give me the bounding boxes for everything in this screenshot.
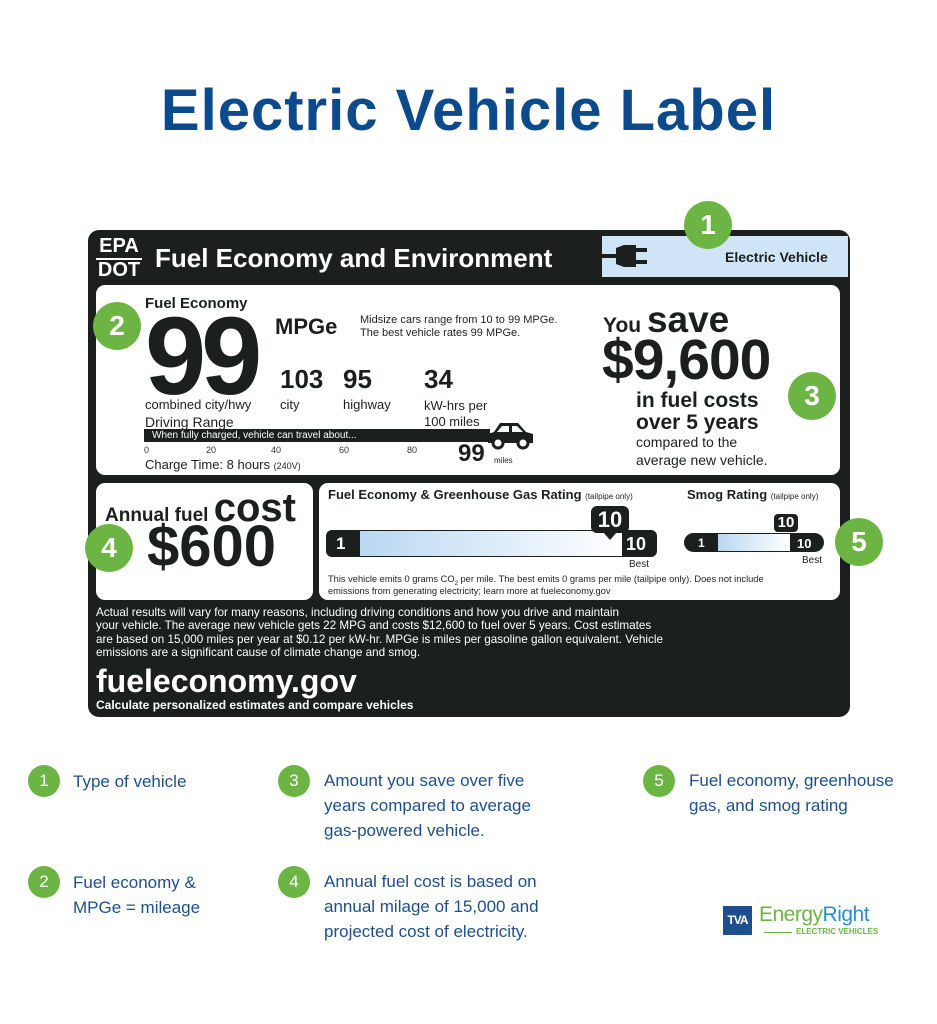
savings block: You save — [603, 299, 729, 340]
smog marker — [774, 514, 798, 532]
smog rating bar: 10 — [797, 536, 811, 551]
panel: fuel economy: combined city/hwy — [145, 397, 251, 412]
header EPA DOT — [96, 235, 142, 281]
panel: fuel economy: kW-hrs per — [424, 398, 487, 413]
footer disclaimer: emissions are a significant cause of climate change and smog. — [96, 646, 420, 659]
smog marker: 10 — [778, 514, 794, 531]
smog rating bar — [684, 533, 824, 552]
driving range bar — [144, 429, 490, 442]
legend item 5: gas, and smog rating — [689, 796, 848, 815]
panel: fuel economy: 20 — [206, 445, 216, 455]
footer disclaimer: are based on 15,000 miles per year at $0.12 per kW-hr. MPGe is miles per gasoline gallon equivalent. Vehicle — [96, 633, 663, 646]
panel: ratings: This vehicle emits 0 grams CO2 per mile. The best emits 0 grams per mile (tailpipe only). Does not include — [328, 574, 764, 587]
badge 3 — [788, 372, 836, 420]
panel: ratings: Fuel Economy & Greenhouse Gas Rating (tailpipe only) — [328, 487, 633, 502]
panel: fuel economy: The best vehicle rates 99 MPGe. — [360, 327, 520, 339]
label: fuel economy sticker — [88, 230, 850, 717]
GHG rating bar: 10 — [626, 534, 646, 554]
panel: fuel economy: 103 — [280, 364, 323, 394]
footer disclaimer: Actual results will vary for many reasons, including driving conditions and how you drive and maintain — [96, 606, 619, 619]
legend item 4: 4 — [289, 872, 299, 891]
logo: TVA EnergyRight: EnergyRight — [759, 903, 869, 926]
icon: car — [488, 423, 533, 450]
panel: ratings: emissions from generating electricity; learn more at fueleconomy.gov — [328, 586, 610, 596]
panel: fuel economy — [96, 285, 840, 475]
vehicle type box — [602, 236, 848, 277]
title: Electric Vehicle Label — [161, 78, 776, 143]
badge 2: 2 — [109, 310, 125, 341]
legend item 1 — [28, 765, 186, 797]
badge 4: 4 — [101, 532, 117, 563]
panel: fuel economy: 99 — [458, 440, 485, 467]
legend item 3 — [278, 765, 531, 840]
panel: fuel economy: 40 — [271, 445, 281, 455]
label: fuel economy sticker: Calculate personalized estimates and compare vehicles — [96, 698, 413, 712]
panel: fuel economy: miles — [494, 456, 513, 465]
badge 4 — [85, 524, 133, 572]
legend item 4: Annual fuel cost is based on — [324, 872, 537, 891]
panel: ratings: Best — [802, 555, 822, 566]
panel: ratings: Best — [629, 559, 649, 570]
panel: annual fuel cost: $600 — [147, 514, 276, 579]
legend item 3: years compared to average — [324, 796, 531, 815]
logo: TVA EnergyRight: ELECTRIC VEHICLES — [796, 927, 878, 936]
panel: fuel economy: highway — [343, 397, 391, 412]
panel: fuel economy: compared to the — [636, 434, 737, 450]
panel: fuel economy: over 5 years — [636, 411, 759, 434]
panel: fuel economy: Midsize cars range from 10 to 99 MPGe. — [360, 314, 557, 326]
panel: fuel economy: MPGe — [275, 314, 337, 339]
smog rating bar: 1 — [698, 536, 705, 550]
legend item 3: Amount you save over five — [324, 771, 524, 790]
logo: TVA EnergyRight — [723, 903, 878, 936]
panel: fuel economy: city — [280, 397, 300, 412]
panel: annual fuel cost: Annual fuel cost — [105, 486, 296, 530]
badge 5 — [835, 518, 883, 566]
legend item 3: 3 — [289, 771, 299, 790]
panel: fuel economy: 60 — [339, 445, 349, 455]
badge 3: 3 — [804, 380, 820, 411]
legend item 2: Fuel economy & — [73, 873, 196, 892]
legend item 2: MPGe = mileage — [73, 898, 200, 917]
legend item 4: annual milage of 15,000 and — [324, 897, 539, 916]
big MPGe number: 99 — [145, 295, 257, 418]
panel: fuel economy: in fuel costs — [636, 389, 759, 412]
footer disclaimer: your vehicle. The average new vehicle gets 22 MPG and costs $12,600 to fuel over 5 years. Cost estimates — [96, 619, 651, 632]
vehicle type text: Electric Vehicle — [725, 249, 828, 265]
icon: plug — [602, 245, 647, 267]
panel: fuel economy: average new vehicle. — [636, 452, 768, 468]
legend item 1: Type of vehicle — [73, 772, 186, 791]
GHG marker — [591, 506, 629, 533]
panel: fuel economy: 80 — [407, 445, 417, 455]
legend item 5: Fuel economy, greenhouse — [689, 771, 894, 790]
panel: ratings — [319, 483, 840, 600]
panel: fuel economy: Fuel Economy — [145, 295, 248, 312]
panel: fuel economy: Driving Range — [145, 414, 234, 430]
GHG marker: 10 — [598, 507, 622, 532]
header title: Fuel Economy and Environment — [155, 243, 552, 273]
badge 5: 5 — [851, 526, 867, 557]
badge 1 — [684, 201, 732, 249]
legend item 3: gas-powered vehicle. — [324, 821, 485, 840]
panel: fuel economy: $9,600 — [602, 328, 770, 392]
panel: fuel economy: 100 miles — [424, 414, 480, 429]
legend item 1: 1 — [39, 771, 49, 790]
legend item 2: 2 — [39, 872, 49, 891]
legend item 5: 5 — [654, 771, 664, 790]
legend item 2 — [28, 866, 200, 917]
footer disclaimer — [96, 606, 663, 659]
header EPA DOT: DOT — [98, 259, 140, 281]
panel: fuel economy: 0 — [144, 445, 149, 455]
logo: TVA EnergyRight: TVA — [727, 913, 748, 927]
panel: fuel economy: 95 — [343, 364, 372, 394]
GHG rating bar — [326, 530, 657, 557]
legend item 4: projected cost of electricity. — [324, 922, 528, 941]
panel: fuel economy: Charge Time: 8 hours (240V) — [145, 457, 301, 472]
panel: annual fuel cost — [96, 483, 313, 600]
GHG rating bar: 1 — [336, 534, 345, 553]
driving range bar: When fully charged, vehicle can travel about... — [152, 430, 357, 441]
panel: fuel economy: 34 — [424, 364, 453, 394]
panel: ratings: Smog Rating (tailpipe only) — [687, 487, 818, 502]
website: fueleconomy.gov — [96, 663, 357, 699]
legend item 5 — [643, 765, 894, 815]
header EPA DOT: EPA — [99, 235, 139, 257]
badge 2 — [93, 302, 141, 350]
badge 1: 1 — [700, 209, 716, 240]
legend item 4 — [278, 866, 539, 941]
